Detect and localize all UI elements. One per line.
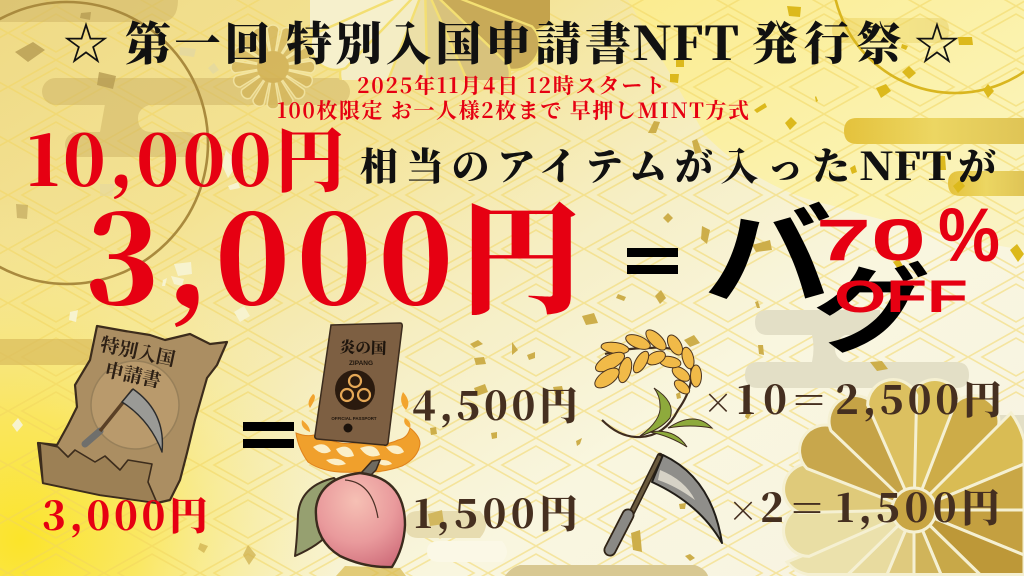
price: rice total: 2,500円 xyxy=(835,370,1002,426)
price: scroll 3,000 yen: 3,000円 xyxy=(42,486,208,542)
scroll lettering: 特別入国 xyxy=(98,330,178,372)
scroll lettering: 申請書 xyxy=(102,355,164,393)
title: NFT xyxy=(632,8,739,74)
icon: peach xyxy=(295,460,405,567)
passport lettering: ZIPANG xyxy=(349,360,373,367)
price: sickle total: ＝ xyxy=(788,478,826,533)
headline: contents: が xyxy=(958,136,996,191)
price: passport 4,500 yen: 4,500円 xyxy=(412,376,578,432)
passport lettering: 炎の国 xyxy=(340,335,387,359)
big text: バグ: グ xyxy=(812,233,930,372)
passport lettering: OFFICIAL PASSPORT xyxy=(331,416,377,421)
equals sign: price xyxy=(627,248,678,274)
price: rice total: ＝ xyxy=(790,370,828,425)
ring: top left xyxy=(0,0,210,286)
title: 特別入国申請書 xyxy=(286,8,631,74)
price: peach 1,500 yen: 1,500円 xyxy=(414,484,578,540)
badge: 70% off: OFF xyxy=(834,271,968,322)
badge: 70% off xyxy=(816,193,1000,322)
price: original 10,000 yen: 10,000円 xyxy=(27,106,345,207)
title xyxy=(63,8,960,74)
price: sickle total xyxy=(728,478,1000,534)
flower: top centre xyxy=(310,0,550,80)
price: rice total: 10 xyxy=(737,370,787,426)
scroll lettering xyxy=(93,330,178,395)
flower: small top xyxy=(231,25,315,109)
price: sickle total: 2 xyxy=(760,478,784,534)
icon: sickle xyxy=(610,455,722,550)
price: rice total: × xyxy=(703,379,733,423)
title: 第一回 xyxy=(125,8,270,74)
equals sign: items xyxy=(243,422,294,448)
icon: wooden passport xyxy=(315,323,402,445)
headline: contents: 相当のアイテムが入った xyxy=(360,136,850,191)
subtitle: limits: 100枚限定 お一人様2枚まで 早押しMINT方式 xyxy=(277,95,749,125)
price: sickle total: 1,500円 xyxy=(836,478,1000,534)
title: ☆ xyxy=(914,8,960,74)
price: 3,000 yen: 3,000円 xyxy=(85,164,582,339)
headline: contents: NFT xyxy=(859,136,952,191)
icon: flames xyxy=(296,392,420,472)
title: 発行祭 xyxy=(752,8,902,74)
badge: 70% off: % xyxy=(938,193,1000,278)
price: sickle total: × xyxy=(728,487,758,531)
big text: バグ xyxy=(704,167,930,372)
badge: 70% off: 70 xyxy=(816,208,926,273)
title: ☆ xyxy=(63,8,109,74)
ring: top right xyxy=(834,0,1024,94)
icon: application scroll xyxy=(38,326,227,503)
big text: バグ: バ xyxy=(704,167,832,329)
price: rice total xyxy=(703,370,1002,426)
subtitle: date: 2025年11月4日 12時スタート xyxy=(357,70,665,100)
passport lettering xyxy=(331,335,387,421)
icon: rice ear xyxy=(592,327,712,447)
flower: bottom right gold chrysanthemum xyxy=(779,375,1024,574)
